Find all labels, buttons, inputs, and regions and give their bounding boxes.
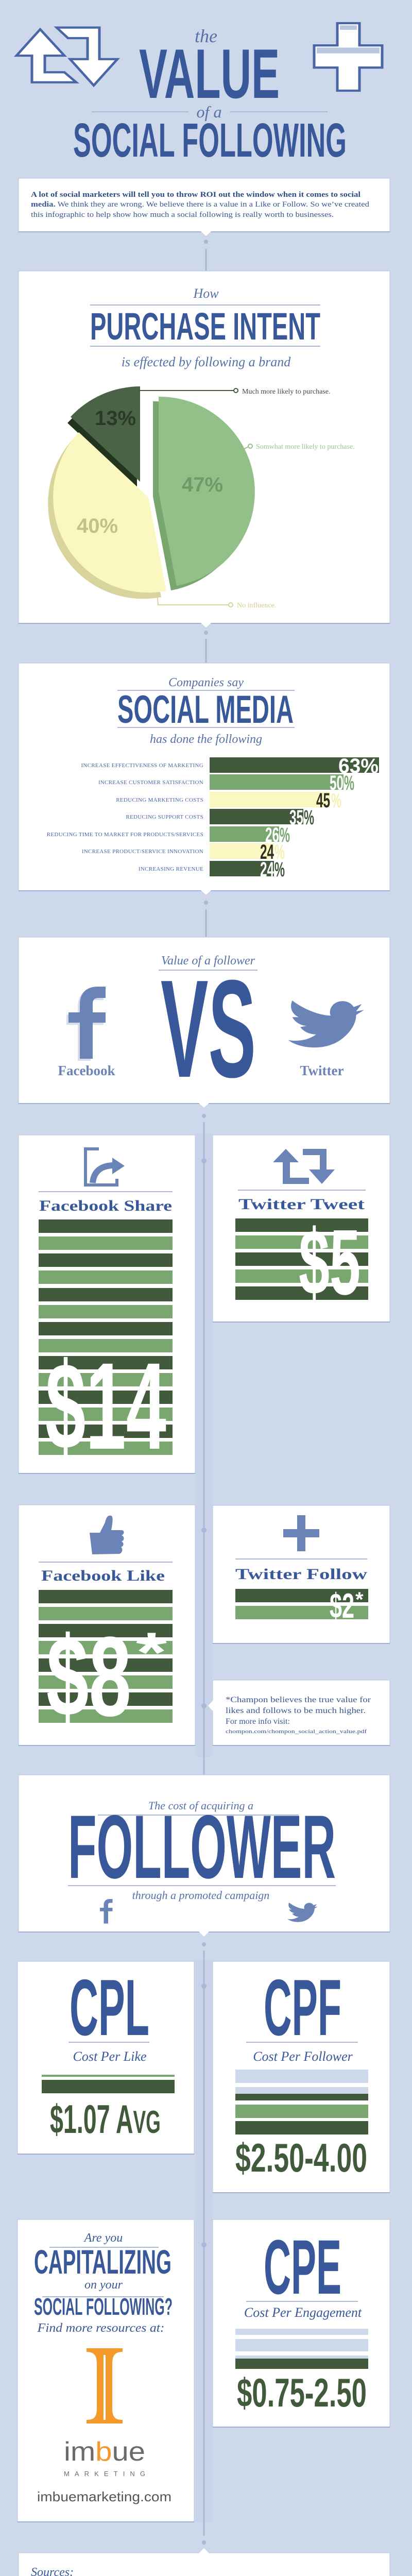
panel: footnote: likes and follows to be much higher.: [226, 1706, 366, 1715]
panel: twitter tweet: [213, 1135, 390, 1322]
icon: facebook f: Facebook: [58, 1063, 115, 1078]
panel: cost of acquiring a follower: The cost of acquiring a: [148, 1799, 253, 1812]
panel: footnote: chompon.com/chompon_social_action_value.pdf: [226, 1728, 367, 1735]
panel: facebook vs twitter: [19, 937, 390, 1108]
bar chart: 45: [316, 789, 330, 812]
icon: twitter bird: [288, 1001, 364, 1078]
icon: facebook small: [100, 1899, 112, 1924]
panel: twitter follow: Twitter Follow: [235, 1566, 367, 1583]
logo: imbue: imbue: [64, 2437, 145, 2467]
bar chart: %: [274, 841, 285, 863]
icon: facebook f: [58, 987, 115, 1078]
bar chart: 26: [265, 824, 279, 846]
bar chart: %: [304, 806, 314, 829]
pie chart: 40%: [77, 515, 118, 537]
panel: capitalizing / imbue: CAPITALIZING: [34, 2243, 171, 2281]
panel: CPE: Cost Per Engagement: [244, 2305, 362, 2320]
stripes: $14: $14: [45, 1337, 166, 1475]
panel: capitalizing / imbue: Are you: [83, 2231, 123, 2245]
stripes: $2: [235, 1586, 368, 1625]
panel: intro: this infographic to help show how much a social following is really worth to businesses.: [31, 211, 334, 219]
bar chart: REDUCING TIME TO MARKET FOR PRODUCTS/SERVICES: [47, 832, 203, 838]
stripes: $14: [39, 1219, 173, 1475]
logo: imbue: MARKETING: [64, 2470, 145, 2478]
panel: intro: A lot of social marketers will tell you to throw ROI out the window when it comes to social: [31, 191, 360, 199]
panel: facebook like: Facebook Like: [41, 1567, 165, 1584]
title: [73, 26, 347, 167]
title: of a: [197, 103, 221, 121]
panel: purchase intent: [19, 271, 390, 628]
bar chart: %: [344, 772, 354, 794]
panel: twitter tweet: Twitter Tweet: [238, 1196, 365, 1213]
bar chart: 50: [330, 772, 344, 794]
stripes: $2: $2: [330, 1586, 354, 1625]
pie legend: No influence.: [237, 602, 276, 609]
panel: CPL: $1.07 AVG: [50, 2096, 161, 2142]
bar chart: %: [280, 824, 290, 846]
pie legend: [138, 388, 355, 609]
heading: purchase intent: [90, 286, 320, 369]
panel: footnote: For more info visit:: [226, 1717, 290, 1726]
stripes: $5: [235, 1211, 368, 1314]
title: the: [195, 26, 217, 46]
panel: footnote: *Champon believes the true value for: [226, 1696, 371, 1704]
icon: plus: [314, 23, 382, 91]
panel: facebook vs twitter: Value of a follower: [161, 954, 255, 968]
heading: purchase intent: How: [193, 286, 219, 301]
icon: share: [85, 1149, 125, 1185]
icon: twitter small: [287, 1903, 318, 1922]
bar chart: 24: [260, 841, 274, 863]
bar chart: %: [331, 789, 341, 812]
panel: intro: [19, 178, 390, 236]
bar chart: INCREASE EFFECTIVENESS OF MARKETING: [81, 762, 203, 769]
logo: imbue: imbuemarketing.com: [37, 2489, 171, 2504]
pie chart: 13%: [95, 407, 136, 430]
pie chart: [48, 386, 355, 609]
panel: CPL: Cost Per Like: [73, 2049, 146, 2064]
bar chart: [47, 755, 379, 881]
panel: sources: [19, 2548, 390, 2576]
icon: retweet arrows: [16, 28, 117, 86]
panel: capitalizing / imbue: Find more resources at:: [37, 2321, 165, 2335]
pie legend: Much more likely to purchase.: [242, 388, 330, 396]
icon: plus: [283, 1515, 319, 1551]
panel: social media: [19, 663, 390, 895]
icon: retweet: [273, 1149, 335, 1184]
panel: capitalizing / imbue: [18, 2219, 194, 2522]
heading: social media: [117, 676, 295, 746]
panel: footnote: [208, 1680, 390, 1745]
stripes: $5: $5: [299, 1211, 360, 1314]
panel: facebook like: [19, 1505, 195, 1745]
title: VALUE: [139, 35, 280, 113]
pie legend: Somwhat more likely to purchase.: [256, 443, 355, 451]
panel: CPL: [18, 1961, 194, 2154]
panel: intro: media. We think they are wrong. We believe there is a value in a Like or Follow. So we’ve created: [31, 200, 370, 209]
panel: facebook share: Facebook Share: [39, 1197, 172, 1214]
panel: facebook share: [19, 1135, 195, 1475]
icon: thumbs up: [90, 1516, 124, 1554]
heading: social media: Companies say: [168, 676, 244, 689]
bar chart: REDUCING SUPPORT COSTS: [126, 814, 203, 820]
logo: imbue: [37, 2348, 171, 2504]
vs text: VS: [161, 952, 256, 1107]
stripes: $2: *: [355, 1588, 364, 1611]
heading: purchase intent: is effected by following a brand: [122, 354, 291, 369]
stripes: $8: *: [136, 1621, 167, 1684]
bar chart: REDUCING MARKETING COSTS: [116, 797, 203, 803]
bar chart: 24: [260, 858, 274, 881]
heading: social media: SOCIAL MEDIA: [117, 688, 294, 732]
stripes: $8: $8: [46, 1613, 131, 1740]
panel: CPF: [213, 1961, 390, 2193]
panel: CPF: Cost Per Follower: [253, 2049, 353, 2064]
bar chart: 63%: [338, 755, 379, 777]
bar chart: 35: [289, 806, 303, 829]
bar chart: INCREASE CUSTOMER SATISFACTION: [98, 779, 203, 786]
panel: capitalizing / imbue: on your: [84, 2278, 123, 2292]
connectors: [196, 240, 212, 2545]
panel: capitalizing / imbue: SOCIAL FOLLOWING?: [34, 2293, 173, 2320]
icon: twitter bird: Twitter: [300, 1063, 344, 1078]
panel: CPL: CPL: [70, 1963, 149, 2052]
bar chart: INCREASING REVENUE: [139, 866, 203, 872]
bar chart: INCREASE PRODUCT/SERVICE INNOVATION: [82, 849, 203, 855]
heading: social media: has done the following: [150, 733, 262, 746]
panel: cost of acquiring a follower: through a promoted campaign: [132, 1889, 269, 1902]
panel: cost of acquiring a follower: [19, 1775, 390, 1937]
bar chart: %: [274, 858, 285, 881]
pie chart: 47%: [182, 473, 223, 496]
panel: CPE: [213, 2219, 390, 2427]
panel: twitter follow: [213, 1505, 390, 1643]
